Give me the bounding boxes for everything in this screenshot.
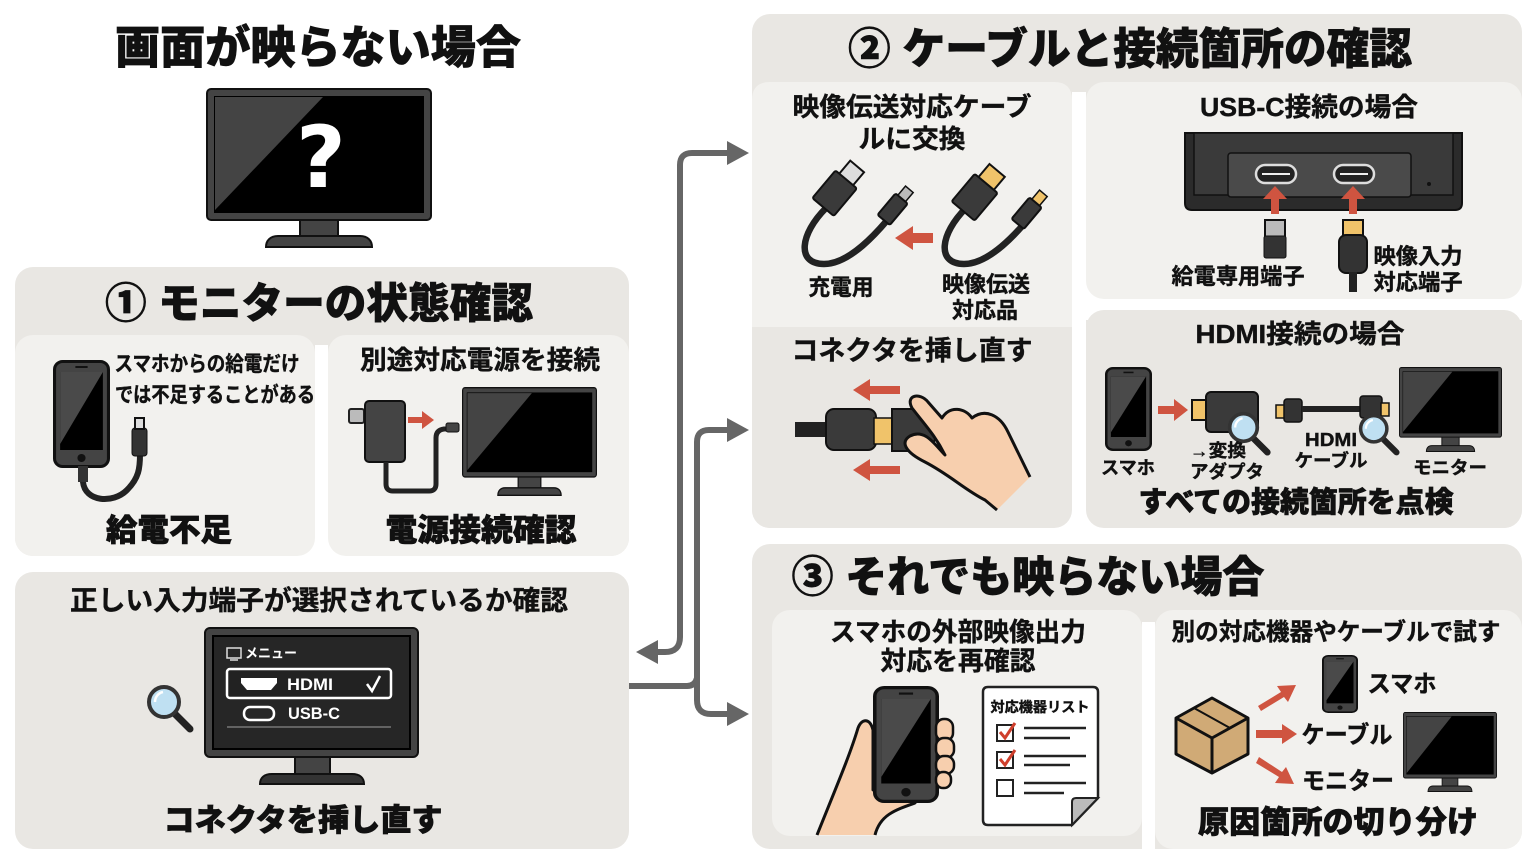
panel: HDMI connection (1086, 310, 1522, 528)
panel: input selection (15, 572, 629, 849)
panel: replace cable (752, 82, 1072, 327)
icon: monitor with question mark: ? (296, 108, 346, 208)
panel: power shortage (15, 335, 315, 556)
icon: menu monitor (205, 628, 418, 784)
panel: HDMI connection: アダプタ (1190, 461, 1264, 482)
panel: if still no picture (752, 544, 1522, 849)
icon: charging cable (805, 157, 915, 264)
panel: reinsert connector (752, 300, 1072, 528)
panel: cable and connection check (752, 14, 1522, 528)
panel: recheck phone output: スマホの外部映像出力 (830, 617, 1086, 647)
panel: reinsert connector: コネクタを挿し直す (792, 336, 1032, 366)
icon: box (1176, 698, 1248, 773)
panel: power shortage: 給電不足 (106, 513, 232, 548)
icon: monitor with question mark (207, 89, 431, 247)
title: 画面が映らない場合 (115, 22, 521, 73)
panel: monitor status check (15, 267, 629, 556)
panel: recheck phone output (772, 610, 1142, 836)
icon: menu monitor: USB-C (288, 704, 340, 723)
heading: section 2: ② ケーブルと接続箇所の確認 (848, 25, 1412, 74)
icon: hand holding phone (817, 688, 954, 835)
panel: try other devices: ケーブル (1302, 721, 1392, 749)
icon: magnifier (149, 687, 190, 729)
panel: try other devices (1155, 610, 1522, 849)
panel: recheck phone output: 対応を再確認 (880, 646, 1036, 676)
panel: replace cable: 対応品 (952, 298, 1018, 323)
panel: HDMI connection: →変換 (1190, 441, 1246, 461)
panel: USB-C connection: 給電専用端子 (1172, 264, 1304, 289)
icon: menu monitor: メニュー (245, 646, 297, 661)
icon: video cable (945, 161, 1049, 264)
heading: section 3: ③ それでも映らない場合 (792, 554, 1264, 602)
arrows: flow connectors (629, 141, 749, 726)
panel: try other devices: 別の対応機器やケーブルで試す (1172, 618, 1500, 646)
panel: HDMI connection: HDMI接続の場合 (1196, 319, 1404, 349)
panel: replace cable: ルに交換 (858, 124, 966, 154)
icon: compatible device list: 対応機器リスト (990, 699, 1090, 715)
panel: USB-C connection: 対応端子 (1374, 270, 1462, 295)
panel: HDMI connection: スマホ (1101, 458, 1155, 478)
panel: USB-C connection: USB-C接続の場合 (1200, 92, 1418, 122)
panel: replace cable: 映像伝送 (942, 272, 1030, 297)
panel: try other devices: モニター (1302, 768, 1394, 795)
panel: HDMI connection: モニター (1413, 458, 1487, 478)
panel: HDMI connection: HDMI (1305, 430, 1357, 450)
panel: replace cable: 充電用 (808, 275, 874, 300)
panel: USB-C connection (1086, 82, 1522, 299)
heading: section 1: ① モニターの状態確認 (105, 280, 533, 327)
panel: input selection: コネクタを挿し直す (164, 803, 443, 838)
panel: power connection (328, 335, 629, 556)
icon: compatible device list (983, 687, 1098, 825)
panel: HDMI connection: すべての接続箇所を点検 (1138, 486, 1454, 519)
panel: replace cable: 映像伝送対応ケーブ (792, 92, 1032, 122)
panel: USB-C connection: 映像入力 (1374, 244, 1462, 269)
panel: try other devices: 原因箇所の切り分け (1198, 805, 1478, 840)
icon: menu monitor: HDMI (287, 675, 333, 694)
panel: HDMI connection: ケーブル (1294, 450, 1368, 471)
panel: power shortage: スマホからの給電だけ (114, 353, 300, 376)
panel: power connection: 別途対応電源を接続 (360, 345, 600, 375)
panel: try other devices: スマホ (1368, 671, 1436, 698)
panel: power shortage: では不足することがある (115, 383, 315, 407)
panel: input selection: 正しい入力端子が選択されているか確認 (70, 585, 568, 616)
panel: power connection: 電源接続確認 (386, 513, 576, 548)
